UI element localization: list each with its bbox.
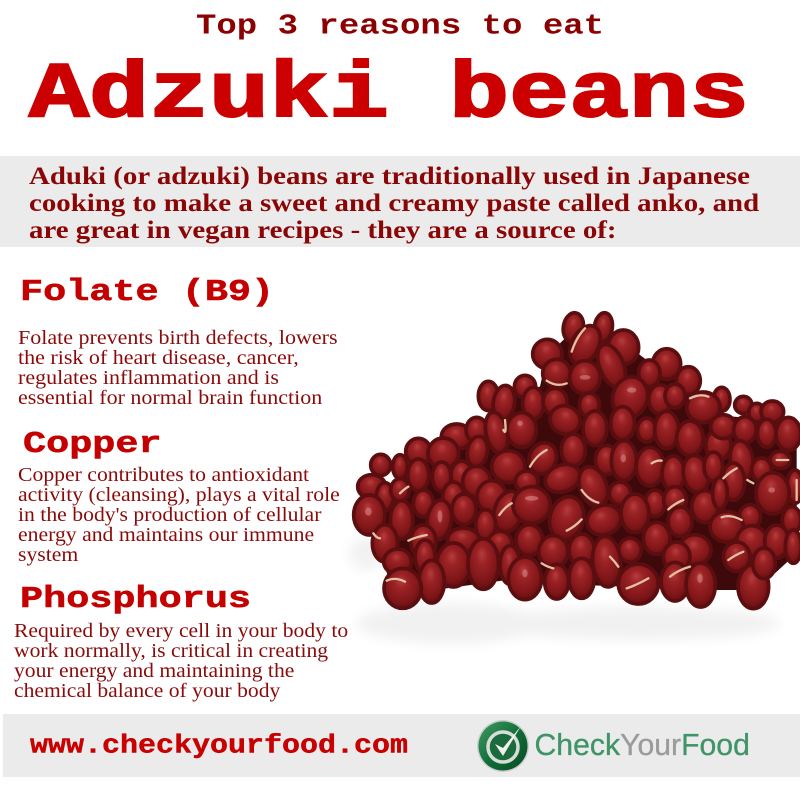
text: Copper <box>18 464 340 566</box>
text: Phosphorus <box>14 620 348 702</box>
bean highlights and seams <box>373 328 797 588</box>
text: Folate: Folate prevents birth defects, lowers <box>18 327 338 349</box>
logo wordmark: CheckYourFood <box>534 729 750 762</box>
text: Copper: in the body's production of cellular <box>18 504 321 526</box>
intro text: are great in vegan recipes - they are a source of: <box>29 217 617 244</box>
text: Folate: regulates inflammation and is <box>18 367 279 389</box>
illustration: pile of adzuki beans <box>352 310 800 642</box>
website url: www.checkyourfood.com <box>30 732 408 761</box>
intro band <box>0 156 800 247</box>
top heading: Top 3 reasons to eat <box>196 11 604 43</box>
text: Copper: energy and maintains our immune <box>18 524 314 546</box>
reflection <box>350 537 780 643</box>
dark mass <box>373 330 797 593</box>
intro text: cooking to make a sweet and creamy paste called anko, and <box>29 190 759 217</box>
text: Phosphorus: work normally, is critical in creating <box>14 640 328 662</box>
text: Phosphorus: chemical balance of your body <box>14 680 280 702</box>
icon: check badge <box>477 720 529 772</box>
intro text: Aduki (or adzuki) beans are traditionally used in Japanese <box>29 163 750 190</box>
heading: Folate: Folate (B9) <box>20 274 274 310</box>
footer band <box>3 714 800 777</box>
text: Folate <box>18 327 338 409</box>
text: Folate: the risk of heart disease, cancer, <box>18 347 299 369</box>
text: Phosphorus: Required by every cell in your body to <box>14 620 348 642</box>
text: Phosphorus: your energy and maintaining the <box>14 660 294 682</box>
heading: Phosphorus: Phosphorus <box>20 581 251 617</box>
text: Copper: Copper contributes to antioxidant <box>18 464 309 486</box>
text: Copper: activity (cleansing), plays a vital role <box>18 484 340 506</box>
text: Folate: essential for normal brain function <box>18 387 322 409</box>
title: Adzuki beans <box>29 51 749 141</box>
heading: Copper: Copper <box>23 426 162 462</box>
intro text <box>29 163 759 244</box>
beans <box>354 311 800 609</box>
text: Copper: system <box>18 544 78 566</box>
logo <box>477 720 750 772</box>
